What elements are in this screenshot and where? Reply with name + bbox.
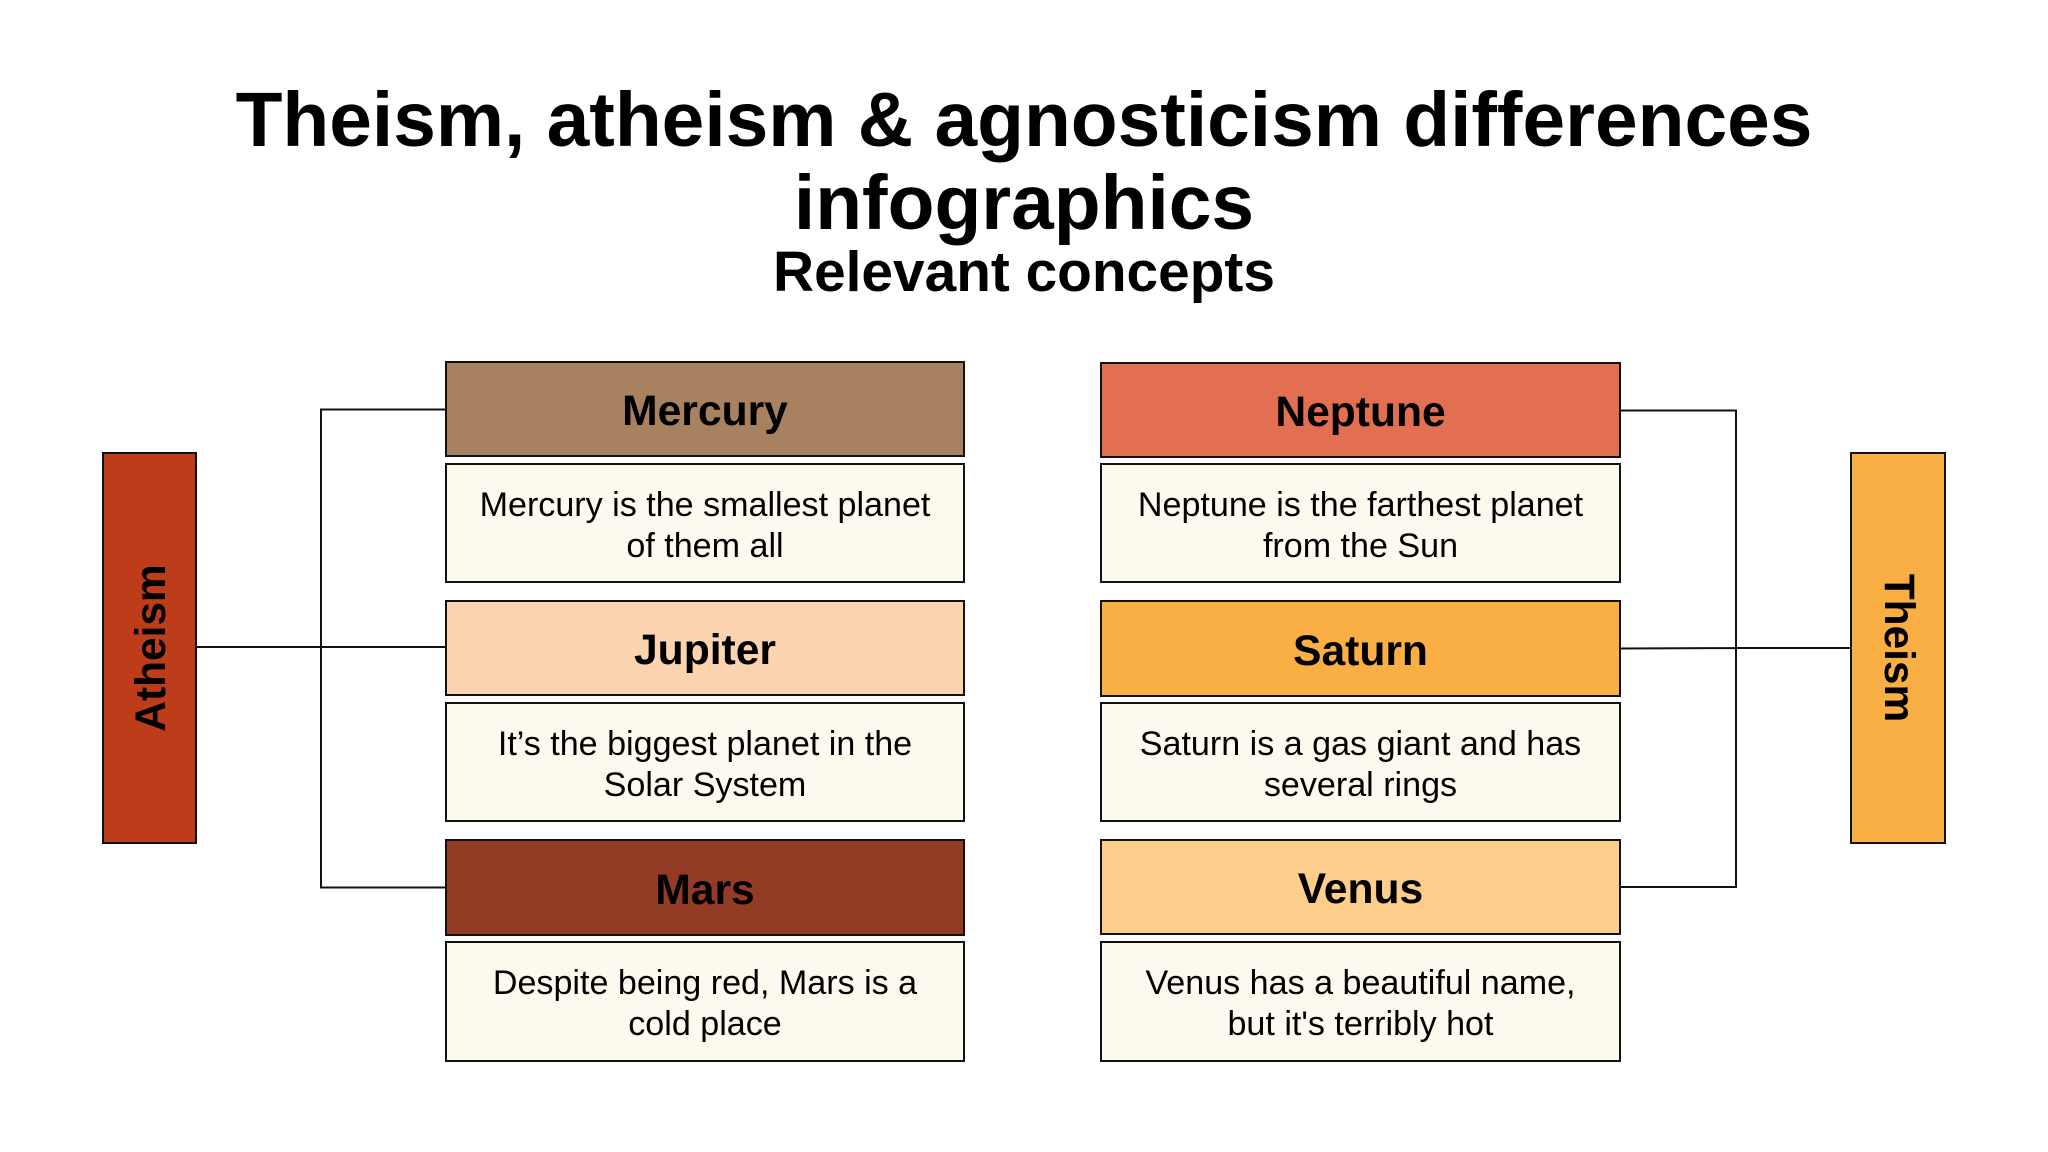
- Mercury heading: [445, 361, 965, 457]
- Jupiter heading: Jupiter: [634, 626, 776, 674]
- panel: Theism label: Theism: [1876, 574, 1922, 722]
- Venus description: Venus has a beautiful name,: [1145, 964, 1576, 1002]
- Mercury heading: Mercury: [622, 387, 788, 435]
- subtitle: Relevant concepts: [773, 241, 1275, 304]
- Mercury description: [445, 463, 965, 583]
- Neptune heading: [1100, 362, 1621, 458]
- Venus description: [1100, 941, 1621, 1062]
- title: Theism, atheism & agnosticism differences: [236, 78, 1812, 163]
- Neptune description: [1100, 463, 1621, 583]
- Jupiter description: [445, 702, 965, 822]
- Neptune description: Neptune is the farthest planet: [1138, 486, 1583, 524]
- panel: Atheism label: Atheism: [126, 564, 174, 732]
- Saturn heading: [1100, 600, 1621, 697]
- panel: Atheism label: [102, 452, 197, 844]
- Saturn description: [1100, 702, 1621, 822]
- panel: Theism label: [1850, 452, 1946, 844]
- Jupiter description: Solar System: [604, 766, 806, 804]
- Saturn heading: Saturn: [1293, 626, 1428, 674]
- Mars heading: [445, 839, 965, 936]
- Neptune heading: Neptune: [1275, 388, 1446, 436]
- Jupiter description: It’s the biggest planet in the: [498, 724, 912, 762]
- Mars description: cold place: [628, 1005, 782, 1043]
- Jupiter heading: [445, 600, 965, 696]
- title: infographics: [794, 161, 1254, 246]
- connector lines: theism: [1621, 410, 1850, 888]
- Mars description: Despite being red, Mars is a: [493, 964, 917, 1002]
- Neptune description: from the Sun: [1263, 526, 1458, 564]
- Venus heading: [1100, 839, 1621, 935]
- Mercury description: Mercury is the smallest planet: [480, 486, 930, 524]
- Venus description: but it's terribly hot: [1227, 1005, 1493, 1043]
- connector lines: atheism: [197, 408, 445, 888]
- Mars description: [445, 941, 965, 1062]
- Mercury description: of them all: [626, 526, 784, 564]
- Saturn description: several rings: [1264, 766, 1457, 804]
- Mars heading: Mars: [655, 866, 755, 914]
- Saturn description: Saturn is a gas giant and has: [1140, 724, 1581, 762]
- title: [236, 78, 1812, 246]
- Venus heading: Venus: [1298, 865, 1423, 913]
